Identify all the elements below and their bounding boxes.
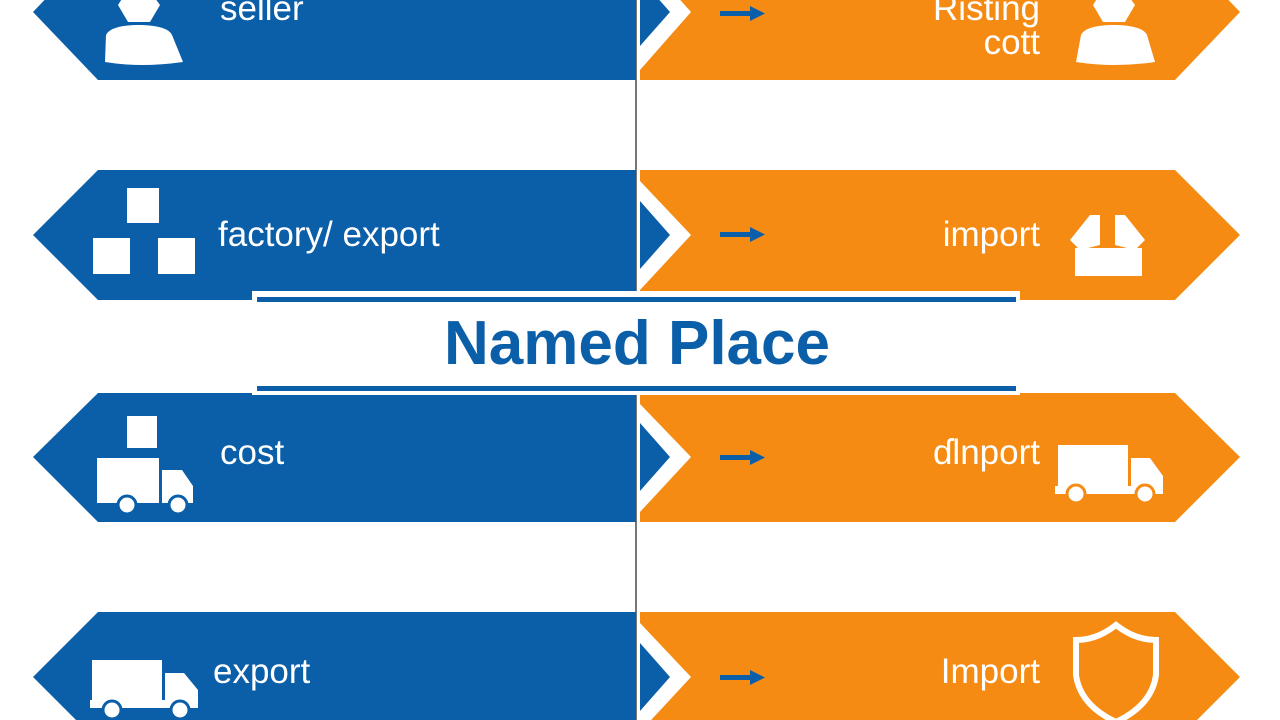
row 3 xyxy=(33,393,1240,522)
arrow xyxy=(720,6,765,21)
icon: truck xyxy=(90,660,198,719)
right banner: Import xyxy=(640,612,1240,720)
left banner: factory/ export: factory/ export xyxy=(218,215,440,254)
icon: truck xyxy=(1055,445,1163,503)
left banner: cost: cost xyxy=(220,433,284,472)
left banner: seller xyxy=(33,0,636,80)
right banner: Risting cott: cott xyxy=(984,23,1040,62)
center divider xyxy=(635,0,637,720)
left banner: factory/ export xyxy=(33,170,636,300)
icon: open box xyxy=(1070,215,1145,276)
right banner: Import: Import xyxy=(941,652,1040,691)
icon: person xyxy=(1076,0,1155,65)
left banner: export xyxy=(33,612,636,720)
row 2 xyxy=(33,170,1240,300)
row 4 xyxy=(33,612,1240,720)
right banner: import: import xyxy=(943,215,1040,254)
icon: boxes xyxy=(93,188,195,274)
row 1 xyxy=(33,0,1240,80)
right banner: dlnport: ɗlnport xyxy=(933,433,1040,472)
right banner: import xyxy=(640,170,1240,300)
icon: truck with box xyxy=(97,416,193,514)
right banner: dlnport xyxy=(640,393,1240,522)
left banner: export: export xyxy=(213,652,311,691)
left banner: cost xyxy=(33,393,636,522)
title: Named Place: Named Place xyxy=(444,309,830,378)
icon: person xyxy=(105,0,183,65)
icon: shield xyxy=(1076,625,1156,720)
title: Named Place xyxy=(252,291,1020,395)
right banner: Risting cott xyxy=(640,0,1240,80)
